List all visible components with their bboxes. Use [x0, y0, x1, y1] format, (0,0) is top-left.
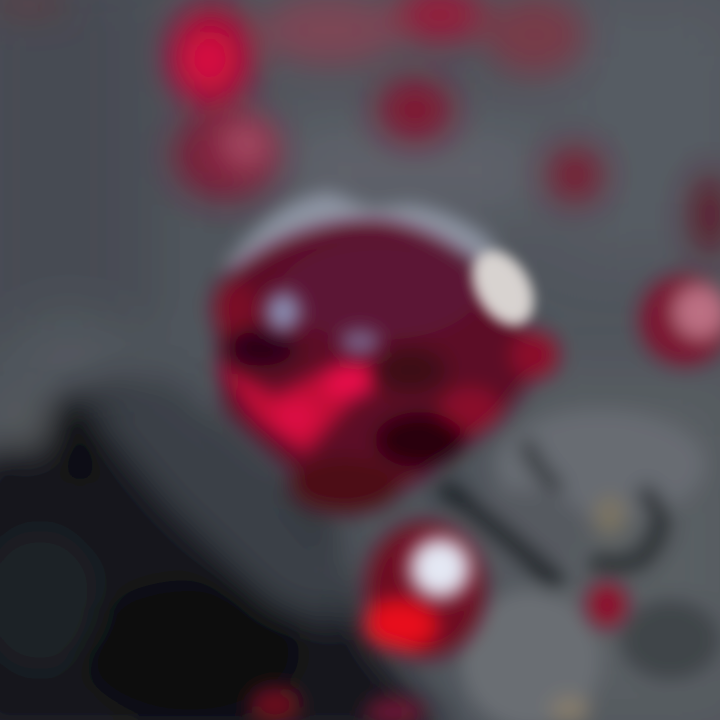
rock: lower right	[440, 410, 720, 720]
ruby: bright red facets	[215, 360, 385, 455]
tiny rubies: bottom	[250, 583, 627, 720]
background gems: top	[0, 0, 720, 257]
ruby: dark facets	[228, 330, 446, 392]
ruby: small glints	[266, 292, 380, 354]
dark rock: lower left	[0, 375, 450, 720]
right gem	[639, 274, 720, 366]
ruby: body	[213, 222, 559, 515]
background gem highlights	[180, 30, 273, 169]
main ruby	[213, 192, 559, 515]
ruby: white highlight	[460, 240, 546, 336]
ruby: crown glints	[225, 192, 500, 280]
small ruby: bottom centre	[364, 522, 485, 658]
